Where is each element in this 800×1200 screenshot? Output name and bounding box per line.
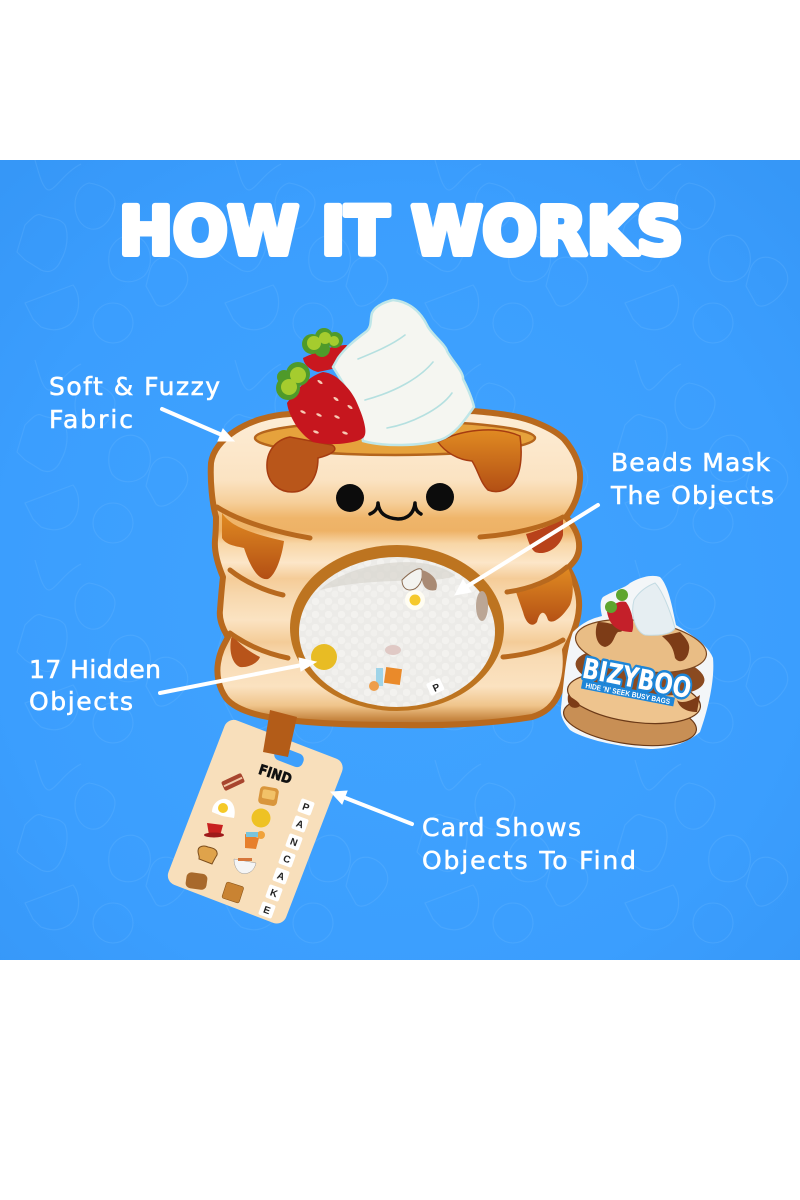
label: soft and fuzzy fabric	[49, 372, 220, 434]
packaging sticker	[560, 576, 713, 753]
fourth layer syrup left	[230, 635, 260, 667]
card heading: FIND	[256, 762, 294, 788]
strap	[263, 710, 297, 757]
pancake plush bag	[211, 300, 580, 725]
whipped cream	[333, 300, 474, 445]
label: beads mask the objects	[610, 448, 774, 510]
back strawberry	[303, 345, 347, 372]
sticker white border	[561, 576, 713, 749]
letter tiles: A	[294, 819, 305, 831]
arrow: to card	[331, 791, 412, 824]
hidden object: waffle coin	[311, 644, 337, 670]
grey tint behind upper beads	[320, 562, 455, 590]
icon: cake	[185, 872, 208, 890]
label: 17 hidden objects: 17 Hidden	[29, 655, 161, 684]
icon: coffee cup	[204, 823, 224, 838]
logo wordmark: BIZYBOO	[580, 652, 694, 705]
icon: juice	[245, 831, 265, 849]
small syrup	[568, 622, 700, 712]
icon: bacon	[221, 773, 245, 791]
brown objects behind beads	[422, 570, 437, 590]
icon: pancake	[258, 786, 279, 807]
icon: egg	[212, 799, 235, 818]
front strawberry	[287, 372, 365, 444]
label: 17 hidden objects: Objects	[29, 687, 133, 716]
pink patch in beads	[385, 645, 401, 655]
label: soft and fuzzy fabric: Fabric	[49, 405, 133, 434]
label: card shows objects to find: Objects To Find	[422, 846, 636, 875]
label: card shows objects to find	[422, 813, 636, 875]
hidden object: egg	[405, 590, 425, 610]
label: beads mask the objects: The Objects	[610, 481, 774, 510]
arrow: to hidden object	[160, 658, 316, 693]
label: soft and fuzzy fabric: Soft & Fuzzy	[49, 372, 220, 401]
icon: toast	[198, 846, 217, 864]
arrow: to beads	[455, 505, 598, 595]
label: beads mask the objects: Beads Mask	[611, 448, 771, 477]
right syrup drip	[438, 430, 521, 492]
strawberry leaves	[276, 328, 343, 400]
layer seam lines	[217, 507, 567, 658]
title: HOW IT WORKS	[119, 193, 683, 270]
label: 17 hidden objects	[29, 655, 161, 716]
left syrup drip	[267, 437, 335, 492]
small third pancake	[564, 665, 704, 731]
hidden object: drink	[369, 667, 402, 691]
brown patch in beads	[476, 591, 488, 621]
hidden object: bowl	[402, 569, 422, 590]
small second layer	[573, 641, 707, 703]
arrow: to fabric	[162, 409, 234, 441]
letter tiles: E	[262, 905, 272, 917]
small strawberry	[605, 589, 633, 632]
syrup pool on top	[255, 421, 535, 455]
small bottom pancake	[560, 689, 700, 753]
icon: cereal bowl	[234, 858, 256, 874]
small top pancake	[572, 612, 710, 680]
hidden object: letter bead: P	[431, 682, 442, 695]
letter tiles: K	[268, 888, 280, 901]
find card	[165, 710, 346, 926]
icon: waffle coin	[252, 808, 270, 828]
plush silhouette	[211, 411, 580, 725]
letter tiles: N	[288, 837, 299, 849]
logo wordmark: HIDE 'N' SEEK BUSY BAGS	[585, 681, 671, 706]
icon: waffle	[222, 882, 244, 903]
second layer syrup left	[222, 513, 284, 579]
letter tiles: P	[301, 802, 311, 814]
face	[336, 483, 454, 519]
letter tiles: A	[275, 871, 286, 883]
letter tiles	[258, 798, 315, 919]
clear window	[290, 545, 504, 711]
card strap and tag	[165, 710, 346, 926]
hidden object: letter bead	[426, 678, 445, 697]
card hole	[272, 745, 306, 769]
label: card shows objects to find: Card Shows	[422, 813, 581, 842]
letter tiles: C	[281, 854, 292, 866]
second layer syrup right	[526, 518, 563, 553]
blue background panel	[0, 160, 800, 960]
third layer syrup right	[516, 568, 573, 625]
small whipped cream	[633, 583, 675, 635]
